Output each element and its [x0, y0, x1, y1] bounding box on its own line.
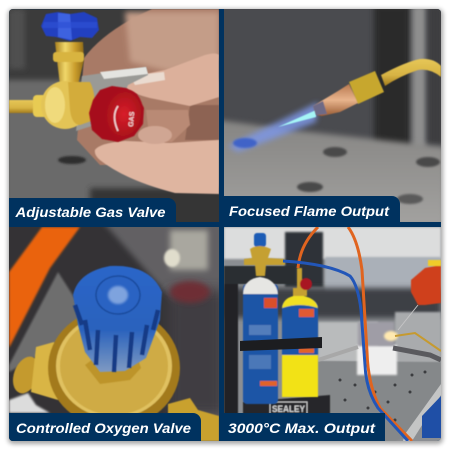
stand: SEALEY: [272, 404, 305, 414]
label: 3000°C Max. Output: 3000°C Max. Output: [228, 420, 376, 436]
orange hose: [9, 227, 80, 348]
photo background: [9, 227, 174, 441]
stand: [224, 265, 331, 413]
label bg: [9, 198, 176, 222]
orange hose: [298, 227, 412, 441]
blue hose: [283, 261, 408, 441]
hand: [77, 9, 219, 194]
panel: focused flame output: [218, 5, 445, 226]
workbench with holes: [218, 120, 445, 226]
label bg: [224, 413, 385, 441]
red valve knob: [89, 86, 146, 142]
white logo on black: [9, 393, 50, 413]
photo background: [224, 9, 441, 222]
panel: 3000°C max output: [224, 227, 441, 441]
yellow gas cylinder: [282, 268, 318, 397]
label: Adjustable Gas Valve: Adjustable Gas Valve: [14, 204, 166, 220]
flame: [228, 102, 318, 152]
blue handwheel: [41, 12, 99, 41]
photo background: [9, 9, 219, 84]
oxygen cylinder valve: [244, 233, 285, 276]
panel: controlled oxygen valve: [8, 222, 224, 445]
label bg: [224, 196, 400, 222]
label bg: [9, 413, 201, 441]
photo background: [224, 227, 441, 441]
brass valve body: [9, 42, 95, 129]
label: Focused Flame Output: Focused Flame Output: [229, 203, 390, 219]
brass regulator: [8, 308, 219, 441]
black cylinder bracket: [240, 337, 322, 351]
steel work table: [318, 360, 441, 369]
white block and welding spark: [318, 305, 441, 375]
label: Controlled Oxygen Valve: Controlled Oxygen Valve: [16, 420, 191, 436]
torch nozzle: [313, 59, 441, 116]
grey regulator body: [76, 67, 148, 131]
panel: adjustable gas valve: [5, 9, 225, 228]
oxygen cylinder: [243, 277, 278, 404]
blue regulator knob: [73, 266, 162, 372]
red valve knob: GAS: [128, 111, 136, 127]
orange glove: [411, 260, 441, 305]
